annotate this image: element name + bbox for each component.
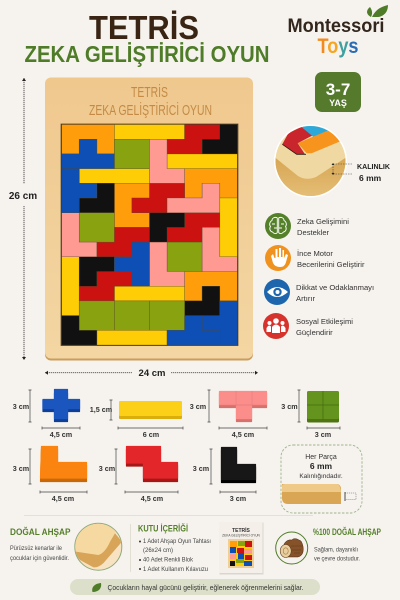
benefit: people: Güçlendirir [296, 328, 333, 337]
piece: orange L [13, 446, 87, 503]
natural wood text: Pürüzsüz kenarlar ile [10, 546, 63, 552]
piece: yellow bar: 1,5 cm [90, 405, 112, 414]
piece: blue plus: 4,5 cm [50, 430, 72, 439]
piece: black L: 3 cm [193, 464, 209, 473]
piece: red Z: 4,5 cm [141, 494, 163, 503]
height dimension: 26 cm: 26 cm [9, 191, 37, 202]
piece: pink T: 4,5 cm [232, 430, 254, 439]
benefit: brain: Destekler [297, 228, 330, 237]
thickness label [357, 162, 391, 183]
benefit: eye: Dikkat ve Odaklanmayı [296, 283, 374, 292]
wood block [282, 484, 341, 504]
board engraved title [89, 83, 212, 119]
piece: green square: 3 cm [315, 430, 331, 439]
product box [219, 522, 264, 574]
footer banner [70, 579, 320, 595]
piece: yellow bar: 6 cm [143, 430, 159, 439]
box contents: 1 Adet Kullanım Kılavuzu [143, 567, 208, 573]
benefit: people: Sosyal Etkileşimi [296, 317, 353, 326]
piece: orange L: 3 cm [13, 464, 29, 473]
age badge [315, 72, 361, 112]
benefit: brain [265, 213, 349, 239]
piece: blue plus [13, 390, 80, 439]
benefit: people [263, 313, 353, 339]
wood corner circle [70, 520, 122, 570]
benefit: hand: İnce Motor [297, 249, 333, 258]
natural wood claim: Sağlam, dayanıklı [314, 548, 358, 554]
callout: piece thickness: Kalınlığındadır. [299, 473, 343, 480]
benefit: eye: Artırır [296, 294, 315, 303]
piece: blue plus: 3 cm [13, 402, 29, 411]
product box: ZEKA GELİŞTİRİCİ OYUN [222, 532, 261, 538]
logo: Montessori Toys [288, 5, 388, 58]
natural wood text [10, 526, 71, 562]
natural wood text: DOĞAL AHŞAP [10, 526, 71, 538]
piece: green square: 3 cm [281, 402, 298, 411]
piece: yellow bar [90, 400, 183, 439]
piece: black L: 3 cm [230, 494, 246, 503]
wooden puzzle board [45, 78, 253, 360]
thickness marker [332, 163, 352, 175]
benefit: brain: Zeka Gelişimini [297, 217, 349, 226]
product box: TETRİS [232, 527, 251, 534]
box contents: (26x24 cm) [143, 548, 173, 554]
board engraved title: TETRİS [131, 83, 168, 101]
benefit: eye [264, 279, 374, 305]
box contents: 40 Adet Renkli Blok [143, 558, 194, 564]
width dimension: 24 cm: 24 cm [139, 368, 165, 379]
benefit: hand [265, 245, 365, 271]
thickness label: 6 mm [359, 173, 382, 183]
title: TETRİS [89, 9, 199, 46]
piece: pink T [190, 390, 267, 439]
callout: piece thickness [281, 445, 362, 513]
footer banner: Çocukların hayal gücünü geliştirir, eğlenerek öğrenmelerini sağlar. [108, 583, 304, 592]
puzzle pieces [61, 124, 238, 346]
piece: red Z [99, 446, 178, 503]
piece: black L [193, 448, 256, 503]
title [24, 9, 270, 67]
logo: Montessori Toys: Toys [318, 35, 358, 58]
box contents: 1 Adet Ahşap Oyun Tahtası [143, 539, 211, 545]
benefit: hand: Becerilerini Geliştirir [297, 260, 365, 269]
natural wood text: çocuklar için güvenlidir. [10, 556, 69, 562]
box contents: KUTU İÇERİĞİ [138, 522, 188, 534]
thickness label: KALINLIK [357, 162, 391, 171]
natural wood claim [313, 526, 381, 562]
piece: pink T: 3 cm [190, 402, 206, 411]
logo: Montessori Toys: Montessori [288, 16, 384, 37]
height dimension: 26 cm [9, 78, 37, 360]
width dimension: 24 cm [45, 368, 258, 379]
piece: red Z: 3 cm [99, 464, 115, 473]
board engraved title: ZEKA GELİŞTİRİCİ OYUN [89, 101, 212, 119]
icon: wooden log [276, 532, 308, 564]
divider [24, 514, 313, 516]
piece: orange L: 4,5 cm [52, 494, 74, 503]
piece: green square [281, 390, 340, 439]
thickness detail circle [274, 124, 390, 198]
age badge: YAŞ [329, 98, 347, 108]
title: ZEKA GELİŞTİRİCİ OYUN [24, 41, 270, 67]
natural wood claim: ve çevre dostudur. [314, 556, 360, 562]
benefits list [263, 213, 374, 339]
box contents [138, 522, 211, 573]
separator [130, 524, 132, 572]
age badge: 3-7 [326, 80, 350, 99]
callout: piece thickness: Her Parça [305, 454, 337, 461]
callout: piece thickness: 6 mm [310, 461, 333, 471]
